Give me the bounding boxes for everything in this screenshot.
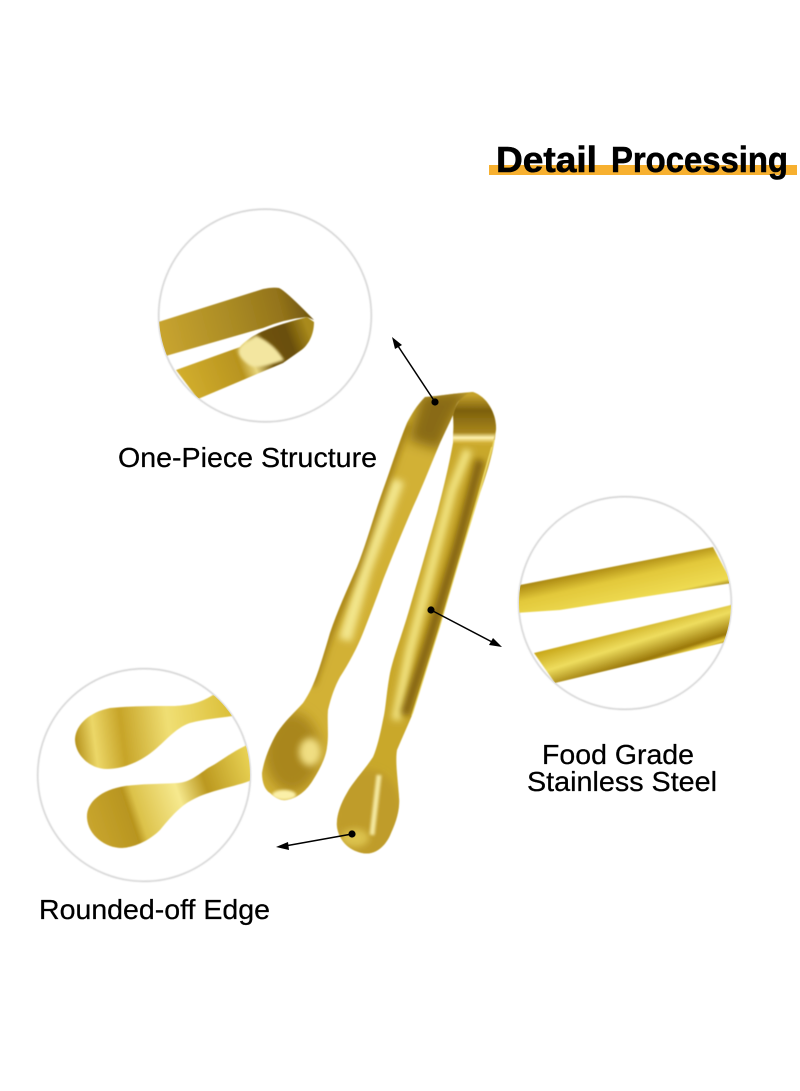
panel: one-piece structure detail circle (152, 209, 371, 422)
label: Food Grade Stainless Steel (527, 739, 717, 797)
main product: gold tongs (255, 385, 505, 861)
tong left arm (255, 385, 480, 805)
tong right arm (336, 391, 497, 854)
panel: rounded-off edge detail circle (38, 669, 252, 881)
title text: Detail (496, 139, 597, 180)
title underline bar (489, 165, 797, 175)
arrow: to one-piece structure (392, 337, 439, 406)
label: Food Grade Stainless Steel: Food Grade (542, 739, 694, 770)
label: Food Grade Stainless Steel: Stainless Steel (527, 766, 717, 797)
arrow: to rounded-off edge (276, 830, 356, 850)
title text (496, 139, 788, 180)
panel: food grade stainless steel detail circle (515, 497, 735, 709)
label: One-Piece Structure: One-Piece Structure (118, 442, 377, 473)
label: Rounded-off Edge: Rounded-off Edge (39, 894, 270, 925)
arrow: to food grade stainless steel (427, 606, 502, 647)
title: Detail Processing (489, 139, 797, 180)
title text: Processing (611, 139, 788, 180)
